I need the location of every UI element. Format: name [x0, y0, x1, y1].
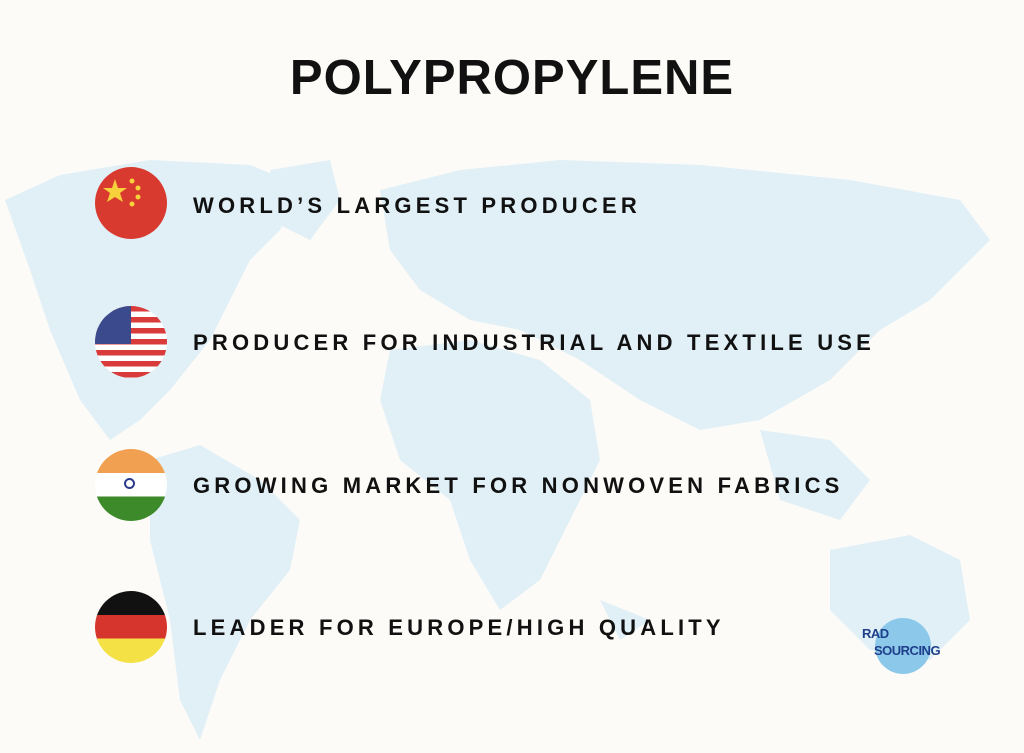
logo: RAD Sourcing: RAD: [862, 626, 889, 641]
icon: India flag: [95, 449, 167, 521]
logo: RAD Sourcing: [862, 618, 940, 674]
text: USA: PRODUCER FOR INDUSTRIAL AND TEXTILE USE: [193, 330, 875, 355]
text: Germany: LEADER FOR EUROPE/HIGH QUALITY: [193, 615, 725, 640]
logo: RAD Sourcing: SOURCING: [874, 643, 940, 658]
text: China: WORLD’S LARGEST PRODUCER: [193, 193, 641, 218]
icon: China flag: [95, 167, 167, 239]
icon: Germany flag: [95, 591, 167, 663]
icon: USA flag: [95, 306, 167, 378]
text: India: GROWING MARKET FOR NONWOVEN FABRICS: [193, 473, 844, 498]
title: POLYPROPYLENE: [290, 51, 734, 105]
